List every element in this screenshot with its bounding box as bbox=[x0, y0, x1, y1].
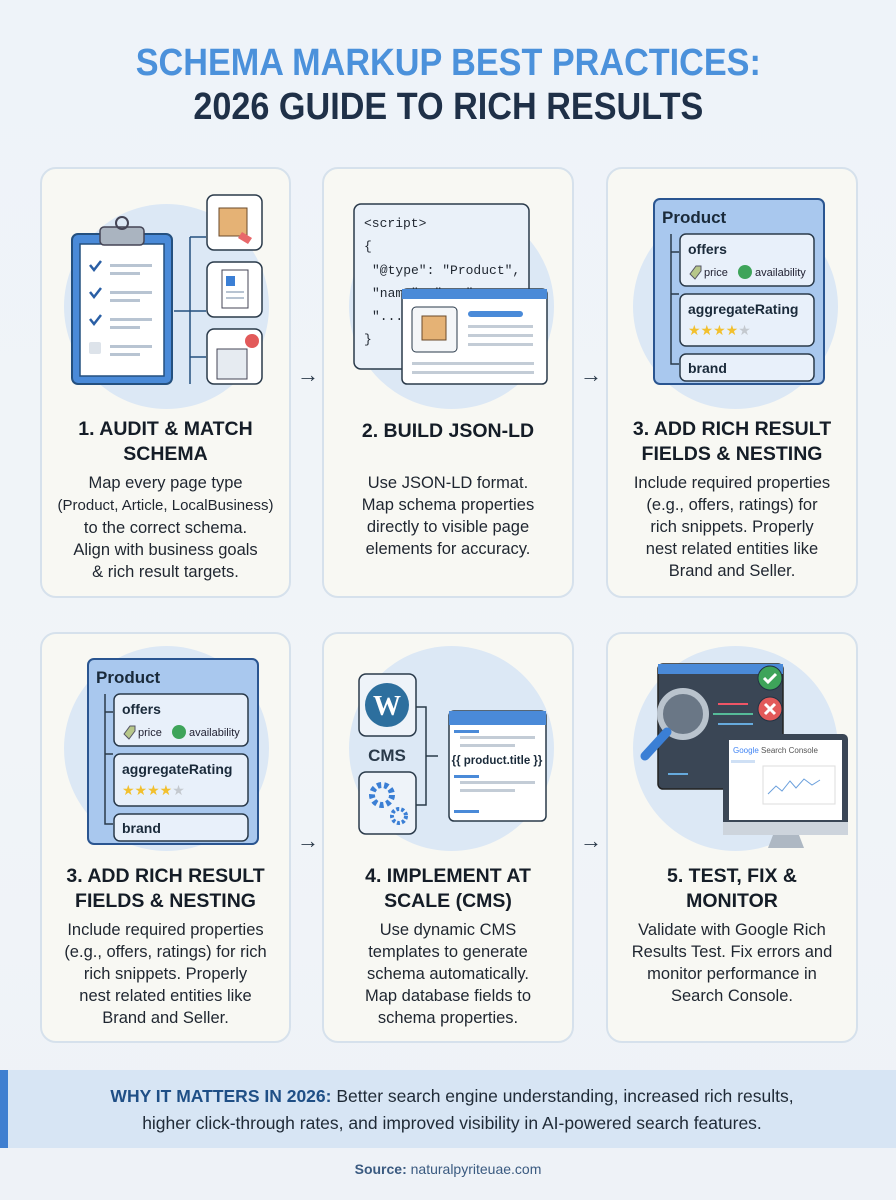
body text: Results Test. Fix errors and bbox=[632, 943, 832, 961]
body text bbox=[362, 474, 534, 558]
heading: FIELDS & NESTING bbox=[75, 890, 256, 912]
body text: Align with business goals bbox=[73, 541, 258, 559]
body text bbox=[58, 474, 273, 581]
body text: & rich result targets. bbox=[92, 563, 239, 581]
icon: magnifier, code, search console monitor: Google Search Console bbox=[733, 746, 819, 755]
heading: 1. AUDIT & MATCH bbox=[78, 418, 253, 440]
icon: code window and browser: "@type": "Product", bbox=[372, 263, 520, 278]
heading: MONITOR bbox=[686, 890, 778, 912]
icon: CMS template: W bbox=[373, 691, 401, 722]
icon: product schema tree: aggregateRating bbox=[688, 301, 798, 317]
icon: product schema tree: Product bbox=[96, 668, 161, 687]
icon: code window and browser: "name": "...", bbox=[372, 286, 481, 301]
icon: code window and browser bbox=[353, 203, 548, 385]
body text: schema properties. bbox=[378, 1009, 518, 1027]
body text: Include required properties bbox=[634, 474, 830, 492]
title line 2: 2026 GUIDE TO RICH RESULTS bbox=[193, 86, 703, 128]
heading: 4. IMPLEMENT AT bbox=[365, 865, 531, 887]
icon: code window and browser: <script> bbox=[364, 216, 427, 231]
heading bbox=[633, 418, 831, 465]
body text: Use JSON-LD format. bbox=[368, 474, 528, 492]
body text bbox=[634, 474, 830, 580]
heading: 3. ADD RICH RESULT bbox=[66, 865, 265, 887]
icon: product schema tree: availability bbox=[755, 267, 806, 279]
icon: product schema tree: price bbox=[138, 727, 162, 739]
panel: step 3 repeat bbox=[40, 632, 291, 1043]
icon: CMS template: {{ product.title }} bbox=[452, 755, 543, 767]
icon: product schema tree: ★★★★★ bbox=[122, 783, 185, 799]
body text bbox=[365, 921, 531, 1027]
icon: code window and browser: } bbox=[364, 332, 372, 347]
heading: FIELDS & NESTING bbox=[642, 443, 822, 465]
icon: product schema tree: offers bbox=[122, 701, 161, 717]
body text: Validate with Google Rich bbox=[638, 921, 826, 939]
arrow: → bbox=[297, 828, 319, 853]
panel: step 5 test bbox=[606, 632, 858, 1043]
heading: SCALE (CMS) bbox=[384, 890, 512, 912]
panel: step 3 rich fields bbox=[606, 167, 858, 598]
icon: product schema tree: brand bbox=[688, 360, 727, 376]
body text: to the correct schema. bbox=[84, 519, 247, 537]
body text: Brand and Seller. bbox=[669, 562, 795, 580]
body text: (e.g., offers, ratings) for bbox=[646, 496, 818, 514]
body text: rich snippets. Properly bbox=[84, 965, 247, 983]
icon: product schema tree bbox=[653, 198, 825, 385]
body text: (e.g., offers, ratings) for rich bbox=[64, 943, 267, 961]
body text: Map database fields to bbox=[365, 987, 531, 1005]
body text bbox=[632, 921, 832, 1005]
panel: step 2 JSON-LD bbox=[322, 167, 574, 598]
body text: Brand and Seller. bbox=[102, 1009, 229, 1027]
arrow: → bbox=[580, 828, 602, 853]
panel: step 1 audit bbox=[40, 167, 291, 598]
heading bbox=[78, 418, 253, 465]
heading: 2. BUILD JSON-LD bbox=[362, 420, 534, 442]
icon: product schema tree: availability bbox=[189, 727, 240, 739]
body text: (Product, Article, LocalBusiness) bbox=[58, 497, 273, 514]
heading: 3. ADD RICH RESULT bbox=[633, 418, 831, 440]
callout: why it matters: higher click-through rates, and improved visibility in AI-powered search features. bbox=[142, 1113, 762, 1133]
body text: nest related entities like bbox=[646, 540, 818, 558]
heading: SCHEMA bbox=[123, 443, 208, 465]
heading bbox=[66, 865, 265, 912]
heading bbox=[365, 865, 531, 912]
heading bbox=[667, 865, 797, 912]
callout: why it matters: WHY IT MATTERS IN 2026: Better search engine understanding, increased rich results, bbox=[110, 1086, 794, 1106]
icon: code window and browser: { bbox=[364, 239, 372, 254]
callout: why it matters bbox=[0, 1070, 896, 1148]
icon: magnifier, code, search console monitor bbox=[640, 663, 848, 848]
icon: clipboard and page types bbox=[71, 194, 263, 385]
icon: CMS template bbox=[358, 673, 547, 835]
body text: directly to visible page bbox=[367, 518, 529, 536]
icon: product schema tree: aggregateRating bbox=[122, 761, 232, 777]
icon: product schema tree: brand bbox=[122, 820, 161, 836]
body text: Map schema properties bbox=[362, 496, 534, 514]
icon: product schema tree: ★★★★★ bbox=[688, 323, 751, 339]
body text: Use dynamic CMS bbox=[380, 921, 516, 939]
body text: rich snippets. Properly bbox=[650, 518, 814, 536]
icon: product schema tree: Product bbox=[662, 208, 727, 227]
icon: CMS template: CMS bbox=[368, 746, 406, 765]
body text: Map every page type bbox=[88, 474, 243, 492]
body text bbox=[64, 921, 267, 1027]
body text: monitor performance in bbox=[647, 965, 817, 983]
icon: product schema tree bbox=[87, 658, 259, 845]
icon: product schema tree: price bbox=[704, 267, 728, 279]
body text: elements for accuracy. bbox=[366, 540, 530, 558]
icon: code window and browser: "... bbox=[372, 309, 403, 324]
source: Source: naturalpyriteuae.com bbox=[355, 1161, 541, 1177]
panel: step 4 CMS bbox=[322, 632, 574, 1043]
body text: Search Console. bbox=[671, 987, 793, 1005]
body text: Include required properties bbox=[67, 921, 264, 939]
body text: schema automatically. bbox=[367, 965, 529, 983]
icon: product schema tree: offers bbox=[688, 241, 727, 257]
body text: templates to generate bbox=[368, 943, 528, 961]
body text: nest related entities like bbox=[79, 987, 252, 1005]
arrow: → bbox=[580, 362, 602, 387]
heading: 5. TEST, FIX & bbox=[667, 865, 797, 887]
title line 1: SCHEMA MARKUP BEST PRACTICES: bbox=[135, 42, 761, 84]
arrow: → bbox=[297, 362, 319, 387]
